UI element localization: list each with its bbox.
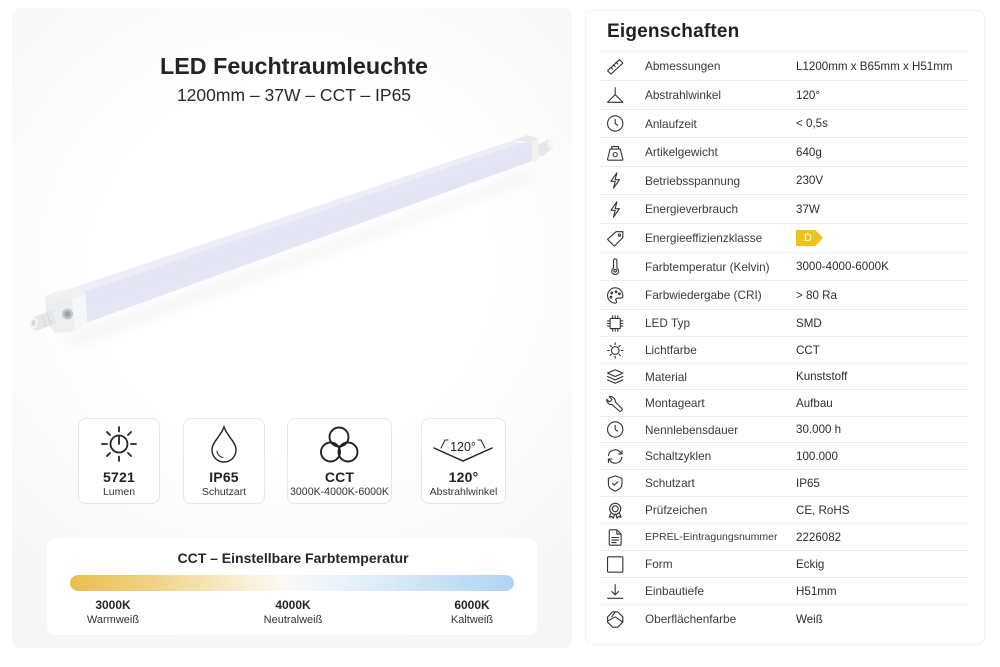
tube top face [72,140,520,294]
row: LED Typ: SMD [796,316,822,330]
row: Abstrahlwinkel [599,81,969,110]
card: Lumen: Lumen [103,486,135,498]
row: Anlaufzeit: Anlaufzeit [645,116,697,130]
card: Abstrahlwinkel: Abstrahlwinkel [430,486,497,498]
icon: beam angle [433,440,493,462]
row: Energieeffizienzklasse: Energieeffizienzklasse [645,231,762,245]
row: LED Typ: LED Typ [645,316,690,330]
label: 6000K [451,598,493,626]
badge: energy class D [796,230,823,246]
row: Prüfzeichen: Prüfzeichen [645,503,707,517]
row: Farbtemperatur: Farbtemperatur (Kelvin) [645,260,770,274]
row: Einbautiefe: H51mm [796,584,837,598]
row: Oberflächenfarbe: Oberflächenfarbe [645,612,736,626]
tube front face [78,142,533,323]
row: Anlaufzeit: < 0,5s [796,117,828,130]
row: Lichtfarbe: CCT [796,344,820,356]
card: CCT: CCT [325,469,354,485]
subtitle: 1200mm – 37W – CCT – IP65 [177,85,411,105]
row: Farbtemperatur: 3000-4000-6000K [796,260,889,273]
row: Abmessungen: L1200mm x B65mm x H51mm [796,60,953,72]
label: 6000K: 6000K [454,598,490,612]
card: IP65: Schutzart [202,486,246,498]
heading: CCT – Einstellbare Farbtemperatur [177,550,409,566]
product image: LED tube light [30,135,553,333]
label: 3000K: Warmweiß [87,614,139,626]
row: Lichtfarbe [599,337,969,364]
title: LED Feuchtraumleuchte [160,53,428,79]
row: Farbwiedergabe [599,281,969,310]
row: Energieeffizienzklasse [599,230,969,253]
row: Farbwiedergabe: > 80 Ra [796,288,837,302]
row: EPREL: 2226082 [796,530,841,544]
row: Farbtemperatur [599,253,969,281]
row: Einbautiefe [599,578,969,605]
row: Anlaufzeit [599,110,969,138]
row: Nennlebensdauer [599,417,969,443]
row: Abmessungen [599,52,969,81]
card: Lumen: 5721 [103,469,135,485]
label: 4000K: 4000K [275,598,311,612]
label: 3000K: 3000K [95,598,131,612]
row: EPREL [599,524,969,551]
label: 6000K: Kaltweiß [451,614,493,626]
row: Form [599,551,969,578]
card: Abstrahlwinkel [421,418,506,504]
row: Montageart: Aufbau [796,396,833,410]
row: Einbautiefe: Einbautiefe [645,584,704,598]
row: Schaltzyklen: Schaltzyklen [645,449,711,463]
row: Oberflächenfarbe [607,611,823,628]
row: Montageart [599,390,969,417]
right end cap [514,135,554,164]
icon: sun [101,426,137,462]
row: Material: Kunststoff [796,370,847,383]
row: Artikelgewicht: 640g [796,146,822,158]
panel: product [12,8,572,648]
row: Abmessungen: Abmessungen [645,59,720,73]
row: Schaltzyklen [599,443,969,470]
row: Artikelgewicht: Artikelgewicht [645,145,718,159]
row: Abstrahlwinkel: 120° [796,88,820,102]
shadow [60,170,538,346]
row: Energieverbrauch: Energieverbrauch [645,202,738,216]
label: 4000K [264,598,322,626]
row: Energieverbrauch [599,195,969,224]
card: Lumen [78,418,160,504]
row: Form: Eckig [796,558,824,570]
row: Betriebsspannung: Betriebsspannung [645,174,740,188]
label: 3000K [87,598,139,626]
row: Schutzart [599,470,969,497]
panel: Eigenschaften [585,10,985,645]
row: Oberflächenfarbe: Weiß [796,612,823,626]
left end cap [30,288,87,333]
row: EPREL: EPREL-Eintragungsnummer [645,531,777,543]
badge: energy class D: D [804,232,812,244]
icon: three circles [320,426,358,462]
row: Prüfzeichen: CE, RoHS [796,504,849,516]
row: Schaltzyklen: 100.000 [796,450,838,462]
card: IP65 [183,418,265,504]
card: CCT [287,418,392,504]
row: Montageart: Montageart [645,396,705,410]
row: Abstrahlwinkel: Abstrahlwinkel [645,88,721,102]
row: Form: Form [645,557,673,571]
row: Schutzart: Schutzart [645,476,695,490]
heading: Eigenschaften: Eigenschaften [607,21,739,42]
row: Nennlebensdauer: 30.000 h [796,423,841,436]
label: 4000K: Neutralweiß [264,614,322,626]
row: Farbwiedergabe: Farbwiedergabe (CRI) [645,288,762,302]
row: Betriebsspannung [599,167,969,195]
card: IP65: IP65 [209,469,239,485]
row: Betriebsspannung: 230V [796,174,823,187]
row: Schutzart: IP65 [796,476,820,490]
row: LED Typ [599,310,969,337]
row: Material [599,364,969,390]
gradient bar [70,575,514,591]
row: Artikelgewicht [599,138,969,167]
row: Lichtfarbe: Lichtfarbe [645,343,697,357]
panel: CCT colour temperature [47,538,537,635]
icon: beam angle: 120° [450,440,476,454]
row: Material: Material [645,370,687,384]
card: Abstrahlwinkel: 120° [449,469,478,485]
row: Prüfzeichen [599,497,969,524]
icon: water drop [211,424,237,463]
card: CCT: 3000K-4000K-6000K [290,486,389,498]
row: Nennlebensdauer: Nennlebensdauer [645,422,738,436]
row: Energieverbrauch: 37W [796,202,820,216]
